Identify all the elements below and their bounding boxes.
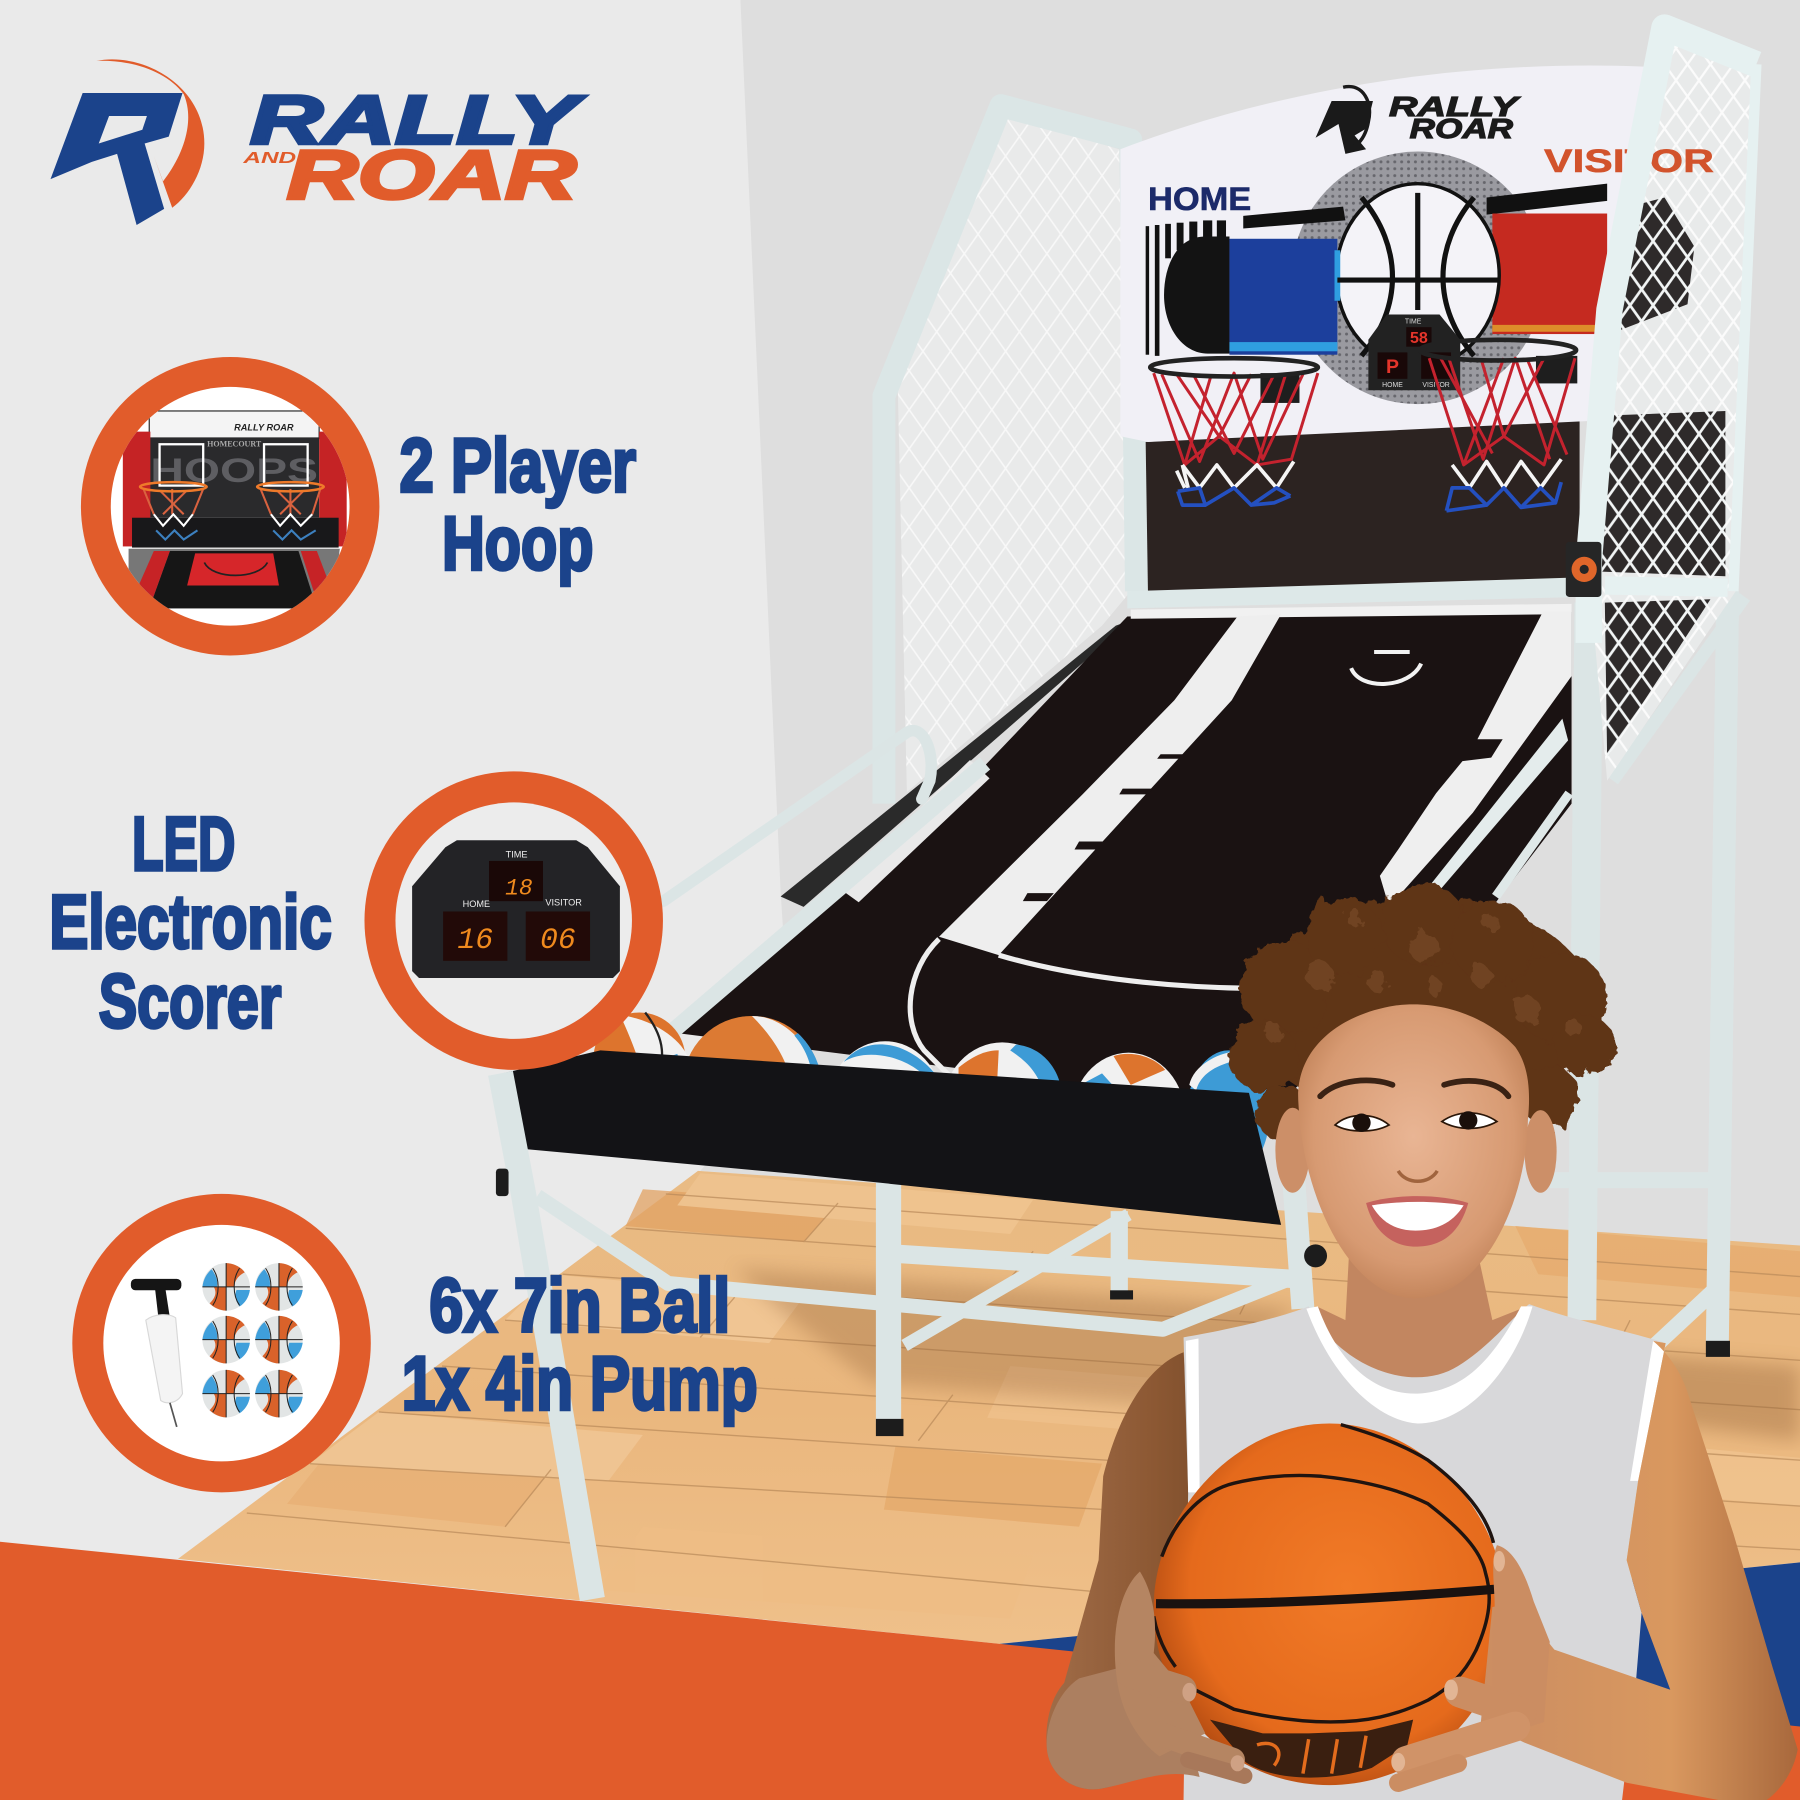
rear legs and floor frame <box>889 591 1745 1423</box>
ramp white fabric edge <box>838 760 990 902</box>
left hoop with net <box>1150 358 1318 505</box>
key arc and free throw line <box>910 939 1251 1079</box>
logo word RALLY: RALLY <box>250 81 586 158</box>
viewer-left arm <box>1046 1352 1263 1789</box>
feature 1: 2 player hoop badge <box>81 357 379 655</box>
feature 1 label: Hoop <box>442 501 593 586</box>
badge photo: arcade hoop: HOMECOURT <box>207 440 262 449</box>
badge photo: arcade hoop: RALLY ROAR <box>234 422 294 432</box>
scoreboard on machine: P <box>1386 356 1399 378</box>
banner logo: RALLY <box>1389 91 1521 122</box>
bottom band: blue <box>1000 1562 1800 1800</box>
neck <box>1317 1257 1527 1406</box>
loose balls row <box>593 1012 1270 1186</box>
ball brand mark <box>1210 1720 1413 1778</box>
logo R <box>51 93 183 225</box>
left frame tube <box>884 106 1136 804</box>
logo word ROAR: ROAR <box>287 137 577 214</box>
left side net panel <box>898 115 1131 792</box>
six small balls <box>202 1263 303 1417</box>
lower diagonal brace <box>537 1196 1295 1329</box>
feature 2 label: LED <box>132 802 235 887</box>
crossbar <box>1127 577 1580 608</box>
feature 2: LED scorer badge <box>364 771 663 1070</box>
center basketball graphic <box>1336 184 1499 367</box>
right knob <box>1304 1244 1327 1267</box>
logo swoosh <box>96 59 204 208</box>
speaker circle <box>1291 152 1544 404</box>
boy holding basketball <box>1046 883 1798 1800</box>
bottom band: orange <box>0 1542 1800 1800</box>
scorer device: VISITOR <box>545 898 582 908</box>
home blue panel <box>1229 239 1337 355</box>
ramp mat <box>677 612 1572 1108</box>
hair <box>1228 883 1614 1153</box>
scorer device: HOME <box>463 899 490 909</box>
feature 2 label <box>49 802 332 1044</box>
right hoop with net <box>1420 340 1577 511</box>
right side net panel <box>1590 34 1752 781</box>
pump <box>131 1279 183 1427</box>
scorer device: 06 <box>540 923 576 957</box>
scoreboard on machine: HOME <box>1382 382 1403 389</box>
handrail <box>664 731 931 901</box>
feature 1 label: 2 Player <box>399 423 636 508</box>
basketball <box>1154 1423 1505 1785</box>
visitor red panel <box>1492 214 1607 334</box>
smile <box>1366 1196 1468 1247</box>
backboard banner <box>1120 66 1644 442</box>
right arm and hand <box>1391 1341 1798 1800</box>
right frame tube <box>1589 28 1756 643</box>
wood floor <box>178 1171 1800 1644</box>
jersey white collar <box>1306 1306 1533 1423</box>
ball catcher basket <box>503 1050 1281 1225</box>
scorer device: TIME <box>506 850 528 860</box>
back wall <box>700 0 1800 1251</box>
badge photo: arcade hoop <box>123 411 347 608</box>
eyes <box>1335 1111 1497 1132</box>
jersey <box>1184 1304 1666 1800</box>
logo word AND: AND <box>242 149 297 167</box>
banner logo <box>1316 87 1521 154</box>
right ramp rail <box>1429 719 1568 893</box>
scorer device: 16 <box>457 923 493 957</box>
feature 2 label: Electronic <box>49 880 332 965</box>
banner stripes <box>1146 184 1607 356</box>
rim marker <box>1351 652 1421 684</box>
control pad <box>1566 542 1601 597</box>
banner logo: ROAR <box>1410 113 1513 144</box>
feature 2 label: Scorer <box>99 959 281 1044</box>
scoreboard on machine: VISITOR <box>1422 382 1450 389</box>
nose <box>1398 1171 1437 1181</box>
front right post <box>1291 1148 1303 1309</box>
feature 3 label <box>402 1264 758 1427</box>
scoreboard on machine <box>1368 315 1460 390</box>
front left leg <box>501 1073 592 1599</box>
logo <box>51 59 586 225</box>
ramp top edge <box>1131 604 1572 619</box>
scoreboard on machine: TIME <box>1405 319 1422 326</box>
scorer device <box>412 840 620 978</box>
leg knob <box>496 1169 509 1196</box>
badge photo: arcade hoop: HOOPS <box>150 452 318 490</box>
feature 3: balls and pump badge <box>72 1194 371 1492</box>
ears <box>1275 1108 1557 1193</box>
jersey white arm trim <box>1186 1339 1666 1492</box>
game machine <box>496 28 1756 1599</box>
key lane band <box>939 614 1281 955</box>
HOME label: HOME <box>1148 181 1251 217</box>
right lane band <box>1380 612 1572 907</box>
lane tick marks <box>1023 754 1186 901</box>
feature 1 label <box>399 423 636 586</box>
feature 3 label: 6x 7in Ball <box>429 1264 730 1349</box>
lower dark backboard <box>1146 416 1580 592</box>
right slider tube <box>1496 793 1569 897</box>
left forearm and hand <box>1047 1572 1244 1789</box>
eyebrows <box>1320 1080 1508 1096</box>
hair highlights <box>1265 910 1581 1042</box>
face <box>1298 1004 1529 1298</box>
home panel <box>1164 236 1229 354</box>
scoreboard on machine: 58 <box>1410 329 1428 347</box>
feature 3 label: 1x 4in Pump <box>402 1342 758 1427</box>
leg feet <box>876 1290 1730 1436</box>
ramp side slider <box>781 620 1132 907</box>
front left rail <box>664 763 985 1039</box>
VISITOR label: VISITOR <box>1544 143 1714 179</box>
scorer device: 18 <box>505 875 533 901</box>
